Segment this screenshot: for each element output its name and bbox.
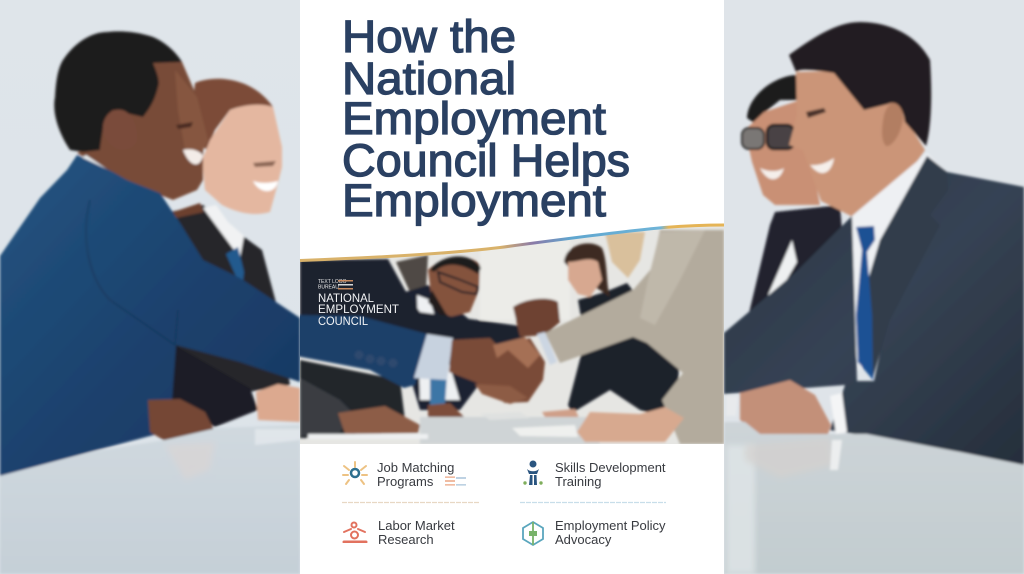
text: Labor Market Research: Labor Market bbox=[378, 518, 455, 533]
text: Employment Policy Advocacy: Employment Policy bbox=[555, 518, 666, 533]
lower left seated person bbox=[300, 360, 467, 438]
text: Job Matching Programs bbox=[377, 460, 454, 489]
title: National bbox=[342, 53, 516, 104]
title: How the bbox=[342, 11, 516, 62]
woman in background bbox=[542, 243, 680, 422]
hand on table right bbox=[577, 407, 684, 442]
logo: National Employment Council: TEXT LOGO bbox=[318, 279, 347, 285]
clasped hands in handshake bbox=[449, 337, 545, 404]
title: Employment bbox=[342, 175, 607, 226]
striped right cuff bbox=[537, 332, 557, 365]
coloured wave rule above photo bbox=[300, 225, 724, 260]
divider: dotted left bbox=[342, 502, 480, 504]
text: Labor Market Research: Research bbox=[378, 532, 434, 547]
background person behind left bbox=[396, 255, 428, 292]
logo: National Employment Council: BUREAU bbox=[318, 284, 339, 290]
grey jacket sleeve and body bbox=[545, 230, 724, 444]
woman with glasses bbox=[739, 73, 844, 312]
man in blue suit bbox=[0, 31, 300, 476]
title: Employment bbox=[342, 93, 607, 144]
photo: handshake at meeting table bbox=[296, 220, 724, 444]
title: Council Helps bbox=[342, 135, 630, 186]
text: Skills Development Training bbox=[555, 460, 666, 489]
divider: dotted right bbox=[520, 502, 666, 504]
text: Job Matching Programs: Job Matching bbox=[377, 460, 454, 475]
text: Employment Policy Advocacy: Advocacy bbox=[555, 532, 612, 547]
title bbox=[342, 11, 630, 226]
icon: employment policy advocacy bbox=[523, 522, 543, 545]
text: Employment Policy Advocacy bbox=[555, 518, 666, 547]
text: Skills Development Training: Training bbox=[555, 474, 601, 489]
icon: small programs legend bbox=[445, 477, 466, 485]
text: Job Matching Programs: Programs bbox=[377, 474, 434, 489]
dark suit back and raised fist bbox=[300, 259, 560, 342]
blonde hair bbox=[605, 232, 645, 278]
text: Skills Development Training: Skills Development bbox=[555, 460, 666, 475]
logo: National Employment Council: EMPLOYMENT bbox=[318, 304, 399, 316]
logo: National Employment Council bbox=[318, 279, 399, 328]
blue suit sleeve with buttons bbox=[296, 315, 427, 388]
logo: National Employment Council: COUNCIL bbox=[318, 316, 369, 328]
icon: skills development bbox=[523, 460, 543, 485]
panel: right photo of smiling colleagues bbox=[724, 0, 1024, 574]
man with glasses bbox=[405, 256, 520, 410]
panel: centre white poster bbox=[300, 0, 724, 574]
meeting table and notebooks bbox=[308, 412, 600, 444]
icon: job matching bbox=[343, 462, 367, 484]
man in charcoal suit bbox=[724, 22, 1024, 465]
glossy table with reflections bbox=[724, 422, 1024, 574]
woman in dark suit bbox=[165, 79, 300, 427]
logo: National Employment Council: NATIONAL bbox=[318, 293, 375, 305]
text: Labor Market Research bbox=[378, 518, 455, 547]
glossy table with reflections bbox=[0, 425, 300, 574]
panel: left photo of smiling colleagues bbox=[0, 0, 300, 574]
striped shirt cuff bbox=[414, 334, 453, 380]
icon: labor market research bbox=[344, 522, 366, 542]
